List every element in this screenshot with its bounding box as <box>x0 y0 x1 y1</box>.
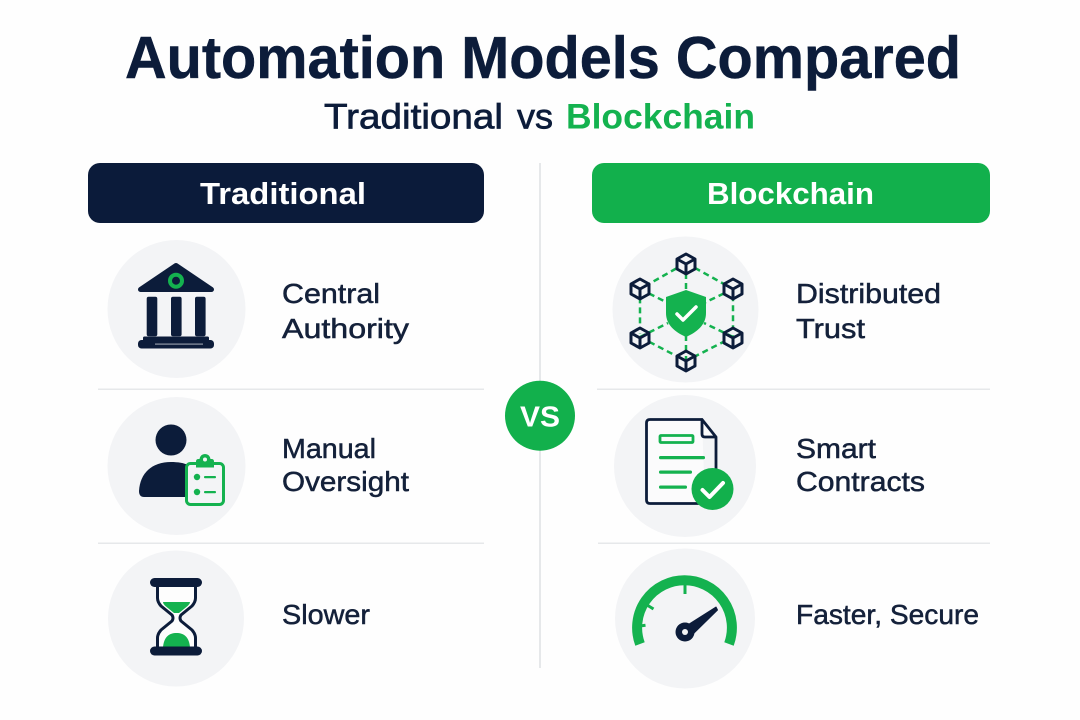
badge: VS: VS <box>520 402 560 434</box>
label: Slower: Slower <box>282 599 370 630</box>
label: Smart Contracts: Smart <box>796 433 876 464</box>
subtitle: Traditional <box>324 98 503 136</box>
icon: bank building <box>108 240 246 378</box>
label: Distributed Trust: Trust <box>796 313 865 344</box>
label: Central Authority: Authority <box>282 313 409 344</box>
header: Blockchain <box>592 163 990 223</box>
header: Traditional <box>88 163 484 223</box>
panel: traditional column <box>88 163 484 686</box>
label: Distributed Trust <box>796 278 941 344</box>
row dividers <box>98 388 990 544</box>
label: Distributed Trust: Distributed <box>796 278 941 309</box>
icon: speedometer gauge <box>615 548 755 688</box>
header: Traditional: Traditional <box>200 176 366 211</box>
icon: hourglass <box>108 550 244 686</box>
label: Smart Contracts <box>796 433 925 497</box>
subtitle: Blockchain <box>566 98 755 136</box>
center divider <box>539 163 541 668</box>
label: Manual Oversight: Oversight <box>282 466 409 497</box>
label: Central Authority: Central <box>282 278 380 309</box>
icon: distributed network with shield <box>612 236 758 382</box>
icon: person with clipboard <box>108 397 246 535</box>
subtitle: vs <box>517 98 553 136</box>
label: Faster, Secure: Faster, Secure <box>796 599 979 630</box>
badge: VS <box>505 381 575 451</box>
label: Smart Contracts: Contracts <box>796 466 925 497</box>
label: Manual Oversight: Manual <box>282 433 376 464</box>
subtitle <box>324 98 755 136</box>
title: Automation Models Compared <box>125 24 961 91</box>
label: Central Authority <box>282 278 409 344</box>
panel: blockchain column <box>592 163 990 688</box>
icon: smart contract document <box>614 395 756 537</box>
header: Blockchain: Blockchain <box>707 176 874 211</box>
label: Manual Oversight <box>282 433 409 497</box>
